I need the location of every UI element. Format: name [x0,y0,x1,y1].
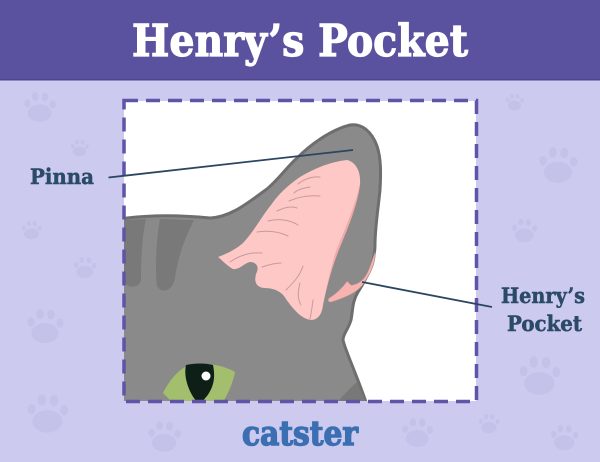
eye [163,364,235,403]
fur stripe left [124,219,146,287]
title: Henry’s Pocket [132,16,469,67]
pointer line: pinna [108,150,353,178]
inner ear [218,160,360,320]
ear hair lines [230,177,320,319]
catster logo: catster [242,414,359,454]
cat illustration [120,125,381,405]
cat head and ear [120,125,381,405]
iris [163,364,235,402]
pointer line: Henry's pocket [362,282,492,307]
label: Henry's Pocket [501,283,585,336]
dashed frame [124,100,476,402]
pupil [185,364,214,403]
eye highlight [202,372,210,380]
label: Henry's Pocket: Pocket [507,311,582,336]
white picture panel [124,101,476,401]
background paw prints [22,92,578,452]
fur stripe right [156,219,194,291]
inner ear shaded edge [323,184,360,305]
label: Pinna: Pinna [30,164,94,189]
header banner [0,0,600,80]
Henry's pocket skin fold [328,252,375,302]
label: Henry's Pocket: Henry’s [501,283,585,308]
neck shadow [338,382,365,401]
